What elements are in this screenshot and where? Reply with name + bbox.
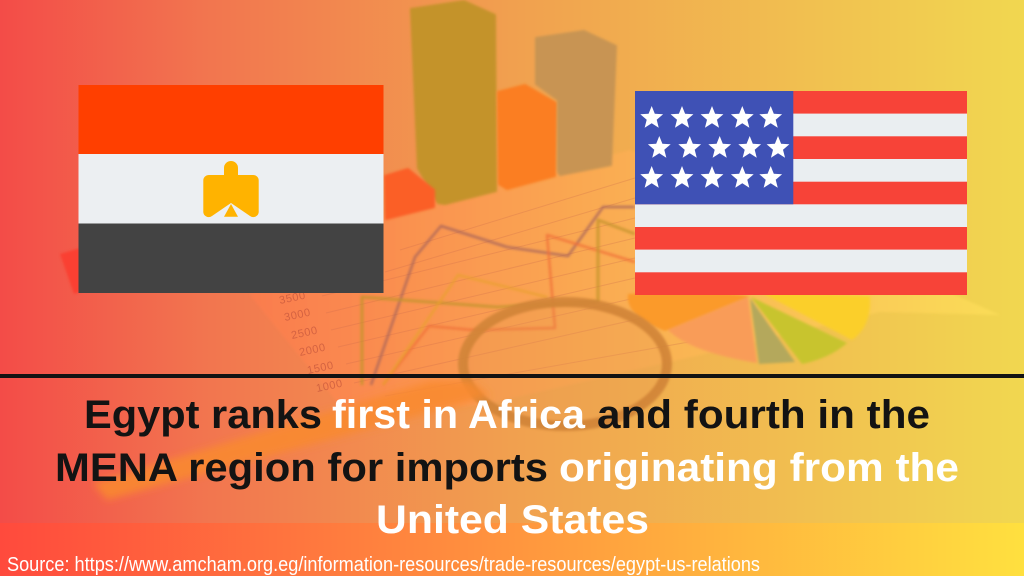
magnifier ring: [463, 302, 667, 426]
line chart traces: [362, 207, 635, 385]
USA flag: [635, 91, 967, 295]
chart paper: [250, 150, 1000, 412]
divider line: [0, 374, 1024, 378]
background photo: charts and magnifier: [60, 1, 1000, 500]
pie chart: [628, 290, 870, 364]
grey bar: [536, 31, 616, 175]
axis numbers: 1500: [306, 360, 335, 377]
headline: originating from the: [559, 446, 959, 490]
stars: [640, 106, 789, 188]
tall olive bar: [411, 1, 496, 204]
orange bar: [498, 85, 556, 189]
axis numbers: [278, 290, 344, 395]
axis numbers: 1000: [315, 378, 344, 395]
headline: MENA region for imports: [55, 446, 548, 490]
red band: [78, 85, 384, 154]
left red shape: [60, 248, 80, 294]
axis numbers: 3500: [278, 290, 307, 307]
stripes: [635, 91, 967, 295]
white band: [78, 154, 384, 224]
blue canton: [635, 91, 793, 204]
black band: [78, 224, 384, 293]
headline: first in Africa: [332, 393, 586, 437]
headline: and fourth in the: [597, 393, 930, 437]
axis numbers: 3000: [283, 307, 312, 324]
orange pencil: [93, 380, 490, 500]
flat red bar: [385, 169, 434, 219]
icon: eagle emblem: [203, 161, 259, 217]
headline: [55, 393, 959, 542]
paper grid lines: [322, 178, 700, 396]
headline: Egypt ranks: [84, 393, 322, 437]
axis numbers: 2500: [290, 325, 319, 342]
headline: United States: [376, 498, 649, 542]
source line: Source: https://www.amcham.org.eg/information-resources/trade-resources/egypt-us-relations: [7, 554, 760, 576]
Egypt flag: [78, 85, 384, 293]
axis numbers: 2000: [298, 342, 327, 359]
